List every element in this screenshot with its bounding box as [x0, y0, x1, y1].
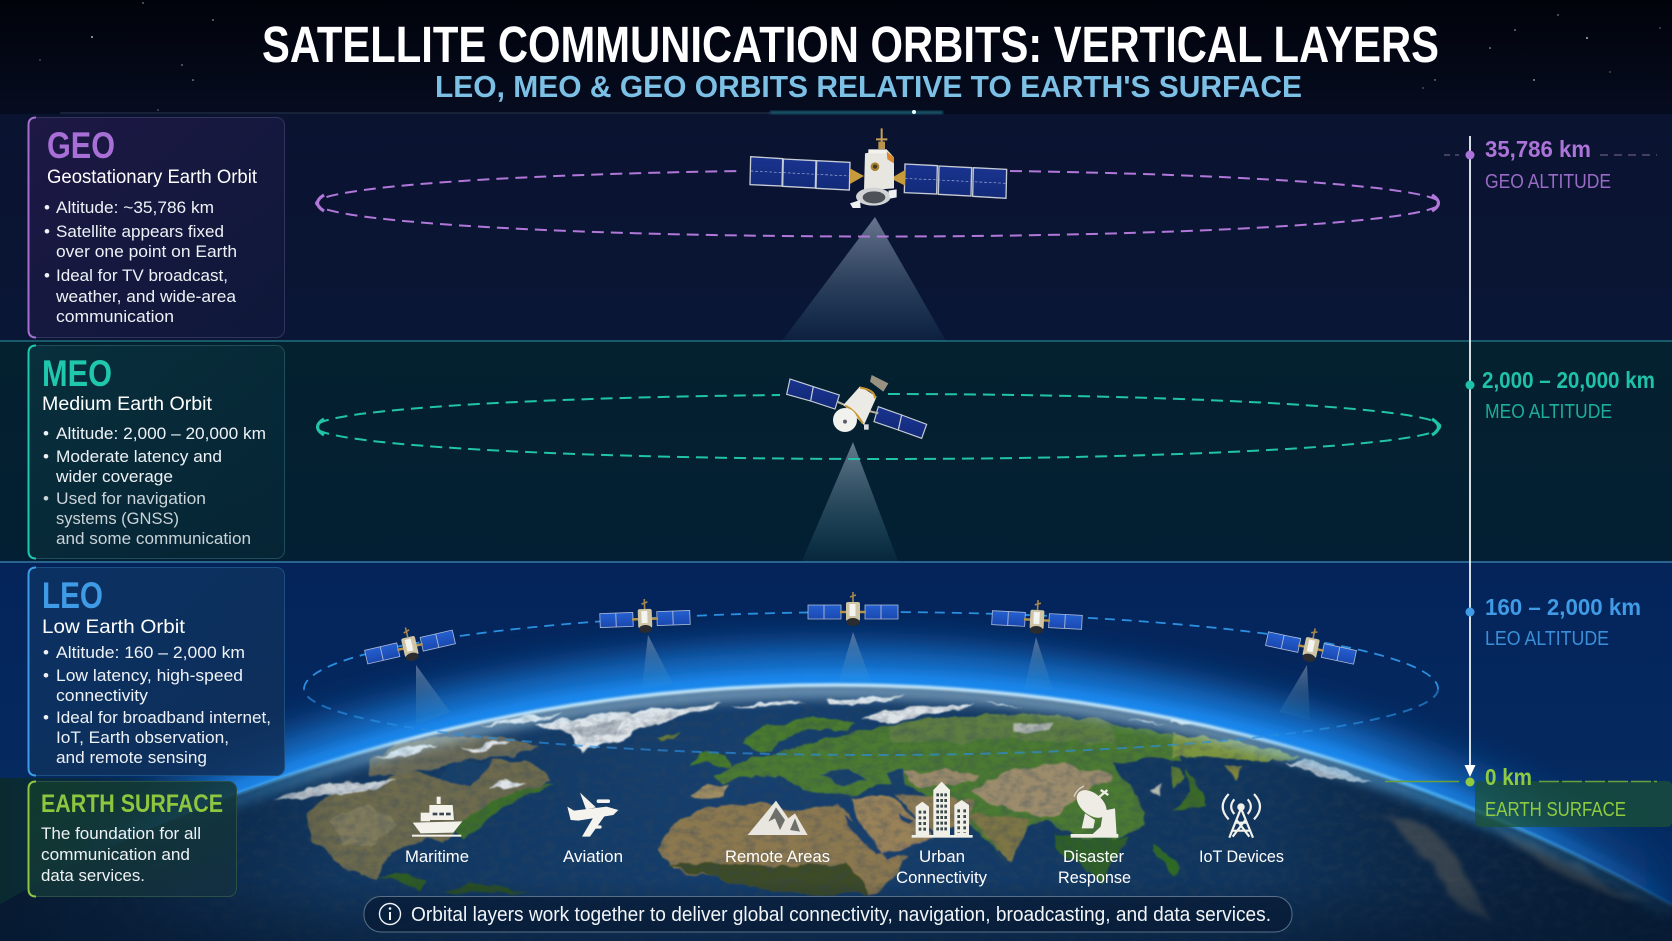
- bottom note pill: [364, 896, 1292, 932]
- MEO bullet list: [43, 424, 266, 548]
- icon: aviation plane: [567, 793, 618, 837]
- far limb land streaks: [1381, 814, 1639, 918]
- MEO band: [0, 341, 1672, 562]
- icon: maritime ship: [412, 797, 462, 837]
- MEO bullet list: and some communication: [56, 529, 251, 548]
- GEO left solar array: [750, 157, 850, 190]
- GEO subtitle: Geostationary Earth Orbit: [47, 167, 258, 188]
- GEO altitude label: GEO ALTITUDE: [1485, 171, 1611, 193]
- GEO bullet list: •: [44, 198, 50, 217]
- GEO heading: GEO: [47, 125, 115, 166]
- GEO altitude value: 35,786 km: [1485, 136, 1591, 162]
- star field: [39, 2, 1661, 111]
- note text: Orbital layers work together to deliver global connectivity, navigation, broadcasting, and data services.: [411, 904, 1271, 926]
- label: Urban Connectivity: [896, 848, 988, 887]
- LEO bullet list: connectivity: [56, 686, 149, 705]
- LEO bullet list: Low latency, high-speed: [56, 666, 243, 685]
- icon: IoT tower: [1223, 794, 1260, 838]
- header glow streak: [770, 110, 943, 114]
- LEO bullet list: •: [43, 666, 49, 685]
- MEO bullet list: •: [43, 489, 49, 508]
- inner haze: [237, 685, 1670, 914]
- land masses: eurasia and africa: [658, 713, 1180, 893]
- GEO bullet list: Ideal for TV broadcast,: [56, 266, 228, 285]
- MEO satellite: [787, 375, 927, 438]
- title: SATELLITE COMMUNICATION ORBITS: VERTICAL LAYERS: [262, 16, 1439, 73]
- GEO bullet list: communication: [56, 307, 174, 326]
- MEO bullet list: •: [43, 447, 49, 466]
- LEO altitude value: 160 – 2,000 km: [1485, 594, 1641, 620]
- Earth surface description: The foundation for all: [41, 824, 201, 843]
- LEO satellite 1: [362, 617, 457, 671]
- Earth surface description: data services.: [41, 866, 145, 885]
- surface texture: [240, 695, 1484, 905]
- LEO altitude label: LEO ALTITUDE: [1485, 628, 1609, 650]
- label: Disaster Response: [1058, 848, 1131, 887]
- LEO satellite 4: [991, 598, 1083, 636]
- earth edge shading: [0, 760, 1672, 941]
- label: Disaster Response: Response: [1058, 869, 1131, 887]
- panel: MEO: [28, 346, 284, 558]
- MEO right solar array: [874, 407, 927, 438]
- GEO bullet list: weather, and wide-area: [55, 287, 237, 306]
- earth atmosphere glow: [0, 673, 1672, 901]
- LEO satellite 3: [808, 592, 898, 626]
- label: Disaster Response: Disaster: [1063, 848, 1125, 866]
- band divider lines: [0, 113, 1672, 562]
- LEO bullet list: and remote sensing: [56, 748, 207, 767]
- MEO altitude label: MEO ALTITUDE: [1485, 401, 1612, 423]
- lower left space shading: [0, 778, 260, 941]
- LEO orbit ring: [304, 612, 1438, 755]
- LEO bullet list: •: [43, 708, 49, 727]
- MEO bullet list: Used for navigation: [56, 489, 206, 508]
- LEO subtitle: Low Earth Orbit: [42, 617, 186, 638]
- LEO altitude marker: [1466, 594, 1641, 650]
- Earth surface altitude marker: [1385, 764, 1672, 827]
- land masses: americas and north atlantic: [307, 734, 730, 893]
- MEO subtitle: Medium Earth Orbit: [42, 394, 213, 415]
- MEO bullet list: Altitude: 2,000 – 20,000 km: [56, 424, 266, 443]
- altitude axis: [1464, 136, 1476, 777]
- limb highlight: [0, 685, 1672, 905]
- Earth surface heading: EARTH SURFACE: [41, 790, 223, 818]
- LEO heading: LEO: [42, 575, 103, 616]
- MEO bullet list: systems (GNSS): [56, 509, 179, 528]
- subtitle: LEO, MEO & GEO ORBITS RELATIVE TO EARTH'S SURFACE: [435, 69, 1302, 104]
- LEO bullet list: Ideal for broadband internet,: [56, 708, 271, 727]
- LEO satellite 5: [1264, 619, 1359, 671]
- LEO bullet list: Altitude: 160 – 2,000 km: [56, 643, 245, 662]
- GEO bullet list: Satellite appears fixed: [56, 222, 224, 241]
- LEO signal beams: [416, 632, 1310, 725]
- label: Aviation: Aviation: [563, 848, 623, 866]
- Earth surface description: communication and: [41, 845, 190, 864]
- Earth surface description: [41, 824, 201, 885]
- icon: remote areas mountains: [748, 801, 808, 835]
- LEO band: [0, 562, 1672, 941]
- MEO bullet list: •: [43, 424, 49, 443]
- earth globe: [0, 670, 1672, 941]
- GEO bullet list: •: [44, 266, 50, 285]
- icon: info: [380, 904, 400, 924]
- MEO heading: MEO: [42, 353, 112, 394]
- label: Maritime: Maritime: [405, 848, 469, 866]
- panel: Earth surface: [28, 782, 236, 896]
- label: Urban Connectivity: Connectivity: [896, 869, 988, 887]
- LEO bullet list: [43, 643, 271, 767]
- GEO altitude marker: [1444, 136, 1657, 193]
- MEO altitude marker: [1466, 367, 1655, 423]
- GEO band: [0, 114, 1672, 341]
- MEO bullet list: Moderate latency and: [56, 447, 222, 466]
- label: IoT Devices: IoT Devices: [1199, 848, 1284, 866]
- GEO bullet list: over one point on Earth: [56, 242, 237, 261]
- LEO satellite 2: [599, 597, 690, 635]
- GEO satellite: [750, 128, 1007, 208]
- panel: GEO: [28, 118, 284, 338]
- LEO bullet list: IoT, Earth observation,: [56, 728, 229, 747]
- MEO orbit ring: [316, 394, 1440, 459]
- GEO right solar array: [904, 164, 1007, 198]
- icon: urban buildings: [912, 782, 973, 838]
- MEO bullet list: wider coverage: [55, 467, 173, 486]
- GEO bullet list: •: [44, 222, 50, 241]
- GEO orbit ring: [316, 171, 1440, 236]
- label: Urban Connectivity: Urban: [919, 848, 965, 866]
- MEO body: [833, 375, 888, 432]
- GEO bullet list: Altitude: ~35,786 km: [56, 198, 214, 217]
- label: Remote Areas: Remote Areas: [725, 848, 830, 866]
- GEO arms and body: [850, 128, 905, 208]
- MEO signal beam: [802, 442, 898, 561]
- panel: LEO: [28, 568, 284, 776]
- header background: [0, 0, 1672, 114]
- MEO altitude value: 2,000 – 20,000 km: [1482, 367, 1655, 393]
- Earth altitude label: EARTH SURFACE: [1485, 799, 1626, 821]
- Earth altitude value: 0 km: [1485, 764, 1532, 790]
- icon: disaster response dish: [1071, 785, 1118, 838]
- clouds and ice: [273, 697, 1372, 802]
- GEO bullet list: [44, 198, 237, 326]
- GEO signal beam: [782, 217, 946, 341]
- land masses: far east: [1172, 733, 1300, 812]
- LEO bullet list: •: [43, 643, 49, 662]
- MEO left solar array: [787, 379, 839, 409]
